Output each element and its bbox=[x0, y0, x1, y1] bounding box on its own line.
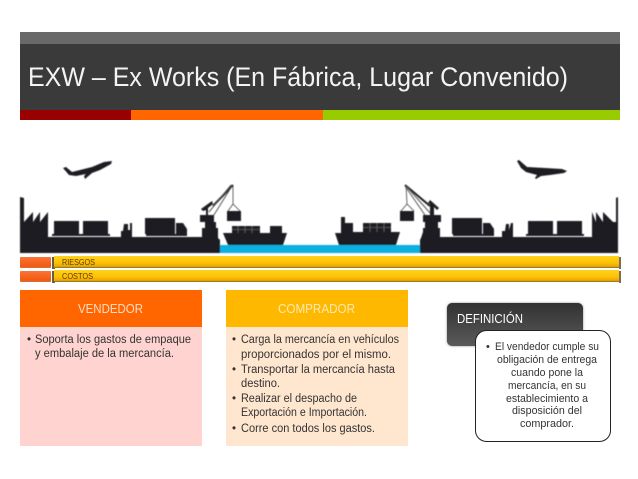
panel: vendedor: VENDEDOR bbox=[78, 302, 143, 316]
left plane bbox=[63, 161, 112, 179]
vendedor list: Soporta los gastos de empaque bbox=[35, 334, 191, 346]
port illustration bbox=[20, 160, 618, 253]
left crane bbox=[200, 185, 241, 229]
comprador list: Realizar el despacho de bbox=[241, 393, 357, 405]
panel: definición: DEFINICIÓN bbox=[457, 311, 523, 326]
comprador list: Corre con todos los gastos. bbox=[241, 423, 375, 435]
comprador list: • bbox=[232, 393, 236, 405]
right truck bbox=[452, 218, 494, 236]
bar: costos: COSTOS bbox=[62, 271, 93, 281]
water bbox=[220, 245, 420, 253]
definition callout bbox=[476, 330, 610, 442]
panel: comprador bbox=[226, 290, 408, 446]
comprador list: destino. bbox=[241, 378, 280, 390]
bar: costos bbox=[20, 270, 621, 283]
definition callout: • bbox=[486, 341, 490, 353]
left truck bbox=[145, 218, 187, 236]
definition callout: establecimiento a bbox=[506, 393, 589, 405]
panel: comprador: COMPRADOR bbox=[278, 302, 355, 316]
vendedor list: y embalaje de la mercancía. bbox=[35, 348, 174, 360]
definition callout: disposición del bbox=[512, 405, 582, 417]
right crane bbox=[400, 185, 441, 229]
comprador list: • bbox=[232, 334, 236, 346]
left forklift bbox=[121, 223, 132, 237]
comprador list: • bbox=[232, 423, 236, 435]
definition callout: comprador. bbox=[520, 418, 574, 430]
definition callout: cuando pone la bbox=[511, 367, 584, 379]
right plane bbox=[517, 160, 567, 179]
definition callout: El vendedor cumple su bbox=[495, 341, 599, 353]
comprador list: Carga la mercancía en vehículos bbox=[241, 334, 399, 346]
left ground with factory bbox=[20, 197, 220, 253]
title: EXW – Ex Works (En Fábrica, Lugar Convenido) bbox=[28, 62, 568, 92]
comprador list: Exportación e Importación. bbox=[241, 407, 367, 419]
bar: riesgos: RIESGOS bbox=[62, 257, 95, 267]
vendedor list bbox=[27, 334, 191, 360]
panel: definición bbox=[447, 303, 610, 442]
comprador list: • bbox=[232, 364, 236, 376]
right forklift bbox=[502, 223, 513, 237]
left ship bbox=[223, 226, 287, 245]
definition callout: mercancía, en su bbox=[508, 380, 586, 392]
comprador list bbox=[232, 334, 399, 435]
right trailers bbox=[526, 221, 584, 236]
vendedor list: • bbox=[27, 334, 31, 346]
comprador list: proporcionados por el mismo. bbox=[241, 349, 391, 361]
definition callout: obligación de entrega bbox=[497, 354, 598, 366]
panel: vendedor bbox=[20, 290, 202, 446]
bar: riesgos bbox=[20, 256, 621, 269]
right ground with factory bbox=[420, 197, 618, 253]
title banner bbox=[20, 32, 620, 120]
comprador list: Transportar la mercancía hasta bbox=[241, 364, 396, 376]
left trailers bbox=[52, 221, 110, 236]
right ship bbox=[335, 217, 400, 245]
